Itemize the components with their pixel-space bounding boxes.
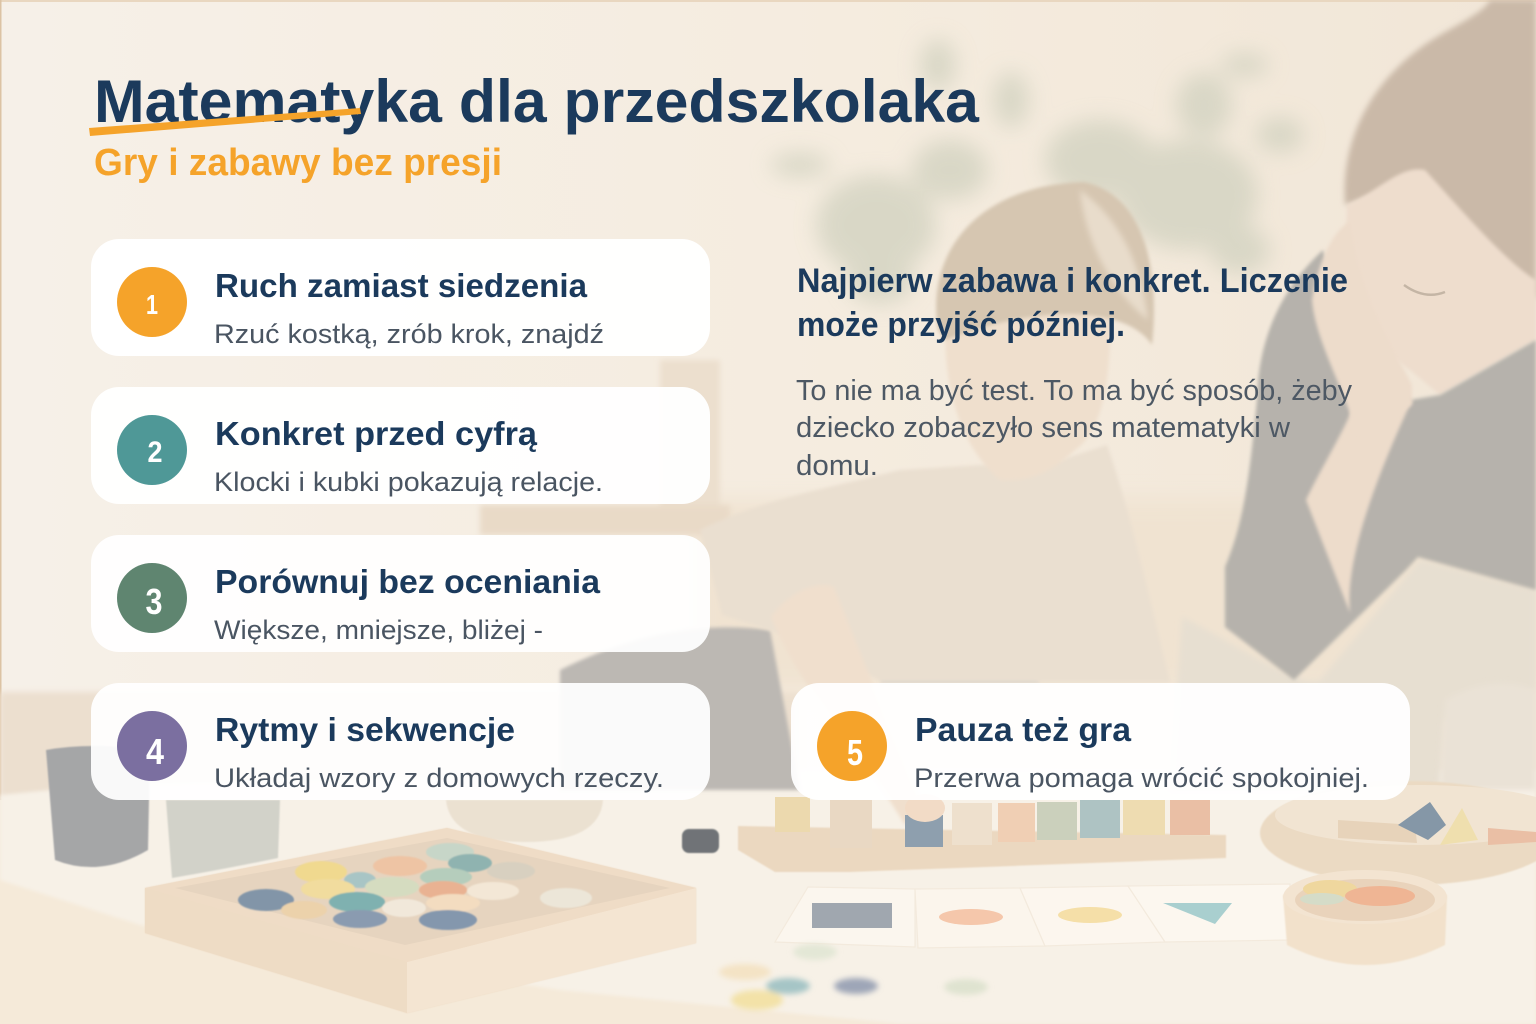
right column key message: może przyjść później. (797, 306, 1125, 344)
card 1 (91, 239, 710, 356)
scattered floor tokens (719, 944, 988, 1010)
title: Matematyka dla przedszkolaka (94, 68, 980, 135)
card 3 (91, 535, 710, 652)
card 5 (791, 683, 1410, 800)
badge 2: 2 (148, 436, 162, 469)
card 3 heading: Porównuj bez oceniania (215, 564, 600, 601)
badge 3 (117, 563, 187, 633)
badge 5: 5 (847, 732, 863, 773)
badge 2 (117, 415, 187, 485)
round tray with wooden shapes (1260, 781, 1536, 885)
cups and bowl (46, 746, 603, 878)
card 1 heading: Ruch zamiast siedzenia (215, 268, 587, 305)
badge 5 (817, 711, 887, 781)
right column body text: domu. (796, 450, 878, 482)
badge 4: 4 (146, 731, 164, 772)
woman figure (1170, 0, 1536, 790)
card 3 description: Większe, mniejsze, bliżej - (214, 615, 543, 645)
small round bowl with tokens (1283, 870, 1447, 965)
card 5 description: Przerwa pomaga wrócić spokojniej. (914, 763, 1369, 793)
right column key message (797, 262, 1348, 344)
wooden tray with tokens (145, 828, 696, 1013)
badge 1: 1 (146, 289, 158, 320)
subtitle: Gry i zabawy bez presji (94, 142, 502, 184)
card 2 (91, 387, 710, 504)
badge 1 (117, 267, 187, 337)
child figure (560, 182, 1170, 825)
right column body text: dziecko zobaczyło sens matematyki w (796, 412, 1291, 444)
card 2 description: Klocki i kubki pokazują relacje. (214, 467, 603, 497)
badge 3: 3 (146, 581, 162, 622)
card 2 heading: Konkret przed cyfrą (215, 416, 537, 453)
right column key message: Najpierw zabawa i konkret. Liczenie (797, 262, 1348, 300)
title accent stroke (89, 108, 361, 136)
badge 4 (117, 711, 187, 781)
card 4 heading: Rytmy i sekwencje (215, 712, 515, 749)
card 5 heading: Pauza też gra (915, 712, 1131, 749)
peg board with blocks (682, 794, 1226, 872)
card 1 description: Rzuć kostką, zrób krok, znajdź (214, 319, 604, 349)
shape cards (775, 884, 1290, 948)
card 4 description: Układaj wzory z domowych rzeczy. (214, 763, 664, 793)
floor and room base (0, 360, 1536, 1024)
card 4 (91, 683, 710, 800)
right column body text (796, 375, 1352, 482)
plant foliage (770, 39, 1304, 304)
right column body text: To nie ma być test. To ma być sposób, żeby (796, 375, 1352, 407)
